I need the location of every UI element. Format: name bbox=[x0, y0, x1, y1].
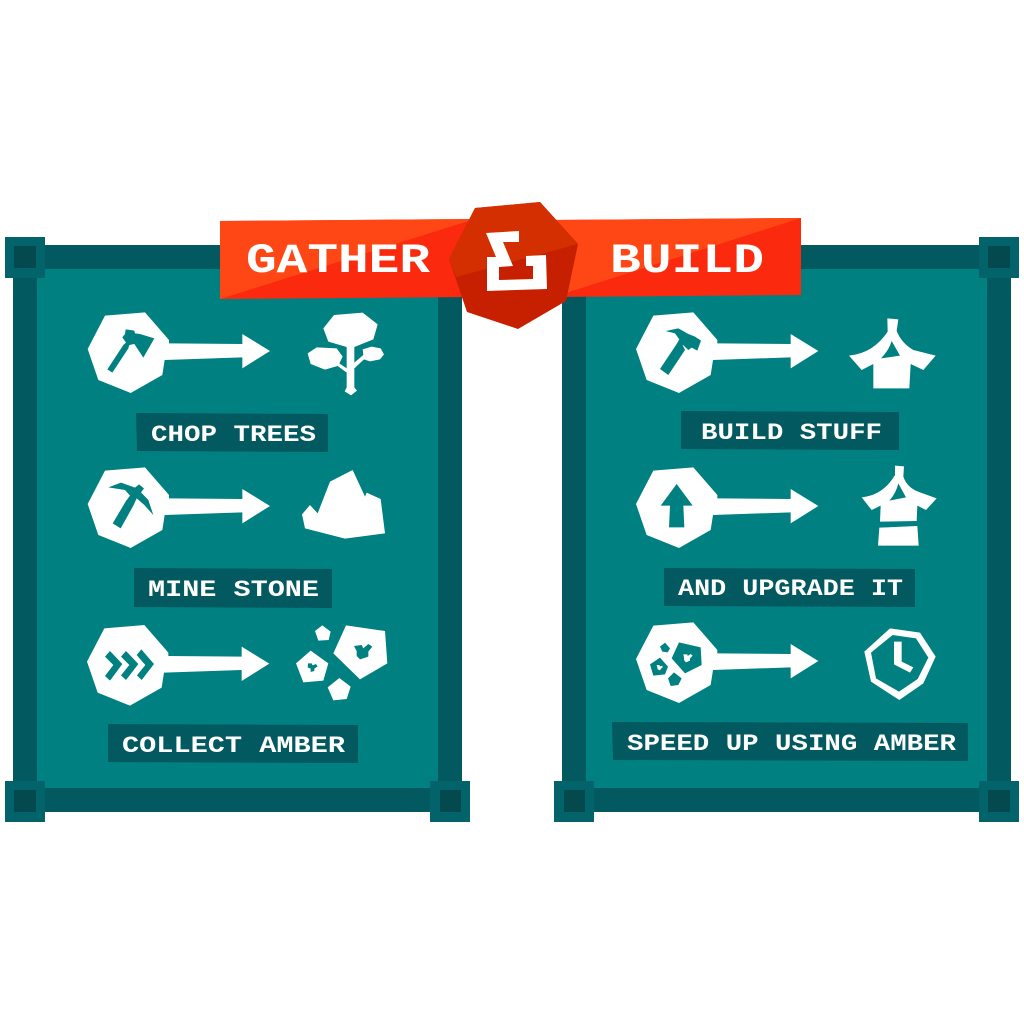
icon: building bbox=[849, 318, 936, 388]
label: and upgrade it bbox=[664, 568, 915, 607]
emblem: ampersand badge bbox=[449, 202, 578, 329]
icon: hammer key with arrow bbox=[636, 312, 818, 393]
banner: build: BUILD bbox=[610, 237, 764, 285]
icon: amber stones bbox=[296, 625, 387, 700]
panel: gather bbox=[5, 237, 470, 822]
label: collect amber: COLLECT AMBER bbox=[122, 733, 345, 759]
label: mine stone bbox=[134, 568, 332, 608]
label: build stuff bbox=[681, 411, 899, 450]
icon: tree bbox=[308, 313, 384, 395]
icon: amber key with arrow bbox=[636, 622, 818, 703]
icon: stone bbox=[302, 470, 385, 539]
icon: upgrade key with arrow bbox=[636, 467, 818, 548]
panel: build bbox=[554, 237, 1019, 822]
banner: gather bbox=[220, 219, 475, 299]
label: chop trees bbox=[136, 413, 328, 452]
label: build stuff: BUILD STUFF bbox=[701, 420, 882, 446]
icon: upgraded building bbox=[862, 466, 937, 546]
banner: build bbox=[550, 218, 801, 298]
label: mine stone: MINE STONE bbox=[148, 577, 319, 603]
label: speed up using amber: SPEED UP USING AMBER bbox=[627, 731, 956, 757]
icon: axe key with arrow bbox=[88, 312, 270, 393]
icon: pickaxe key with arrow bbox=[88, 467, 270, 548]
label: speed up using amber bbox=[612, 722, 968, 761]
label: collect amber bbox=[108, 724, 358, 763]
icon: clock bbox=[864, 628, 936, 700]
label: and upgrade it: AND UPGRADE IT bbox=[678, 576, 903, 602]
label: chop trees: CHOP TREES bbox=[151, 422, 316, 448]
banner: gather: GATHER bbox=[246, 237, 431, 285]
icon: chevrons key with arrow bbox=[87, 625, 269, 706]
